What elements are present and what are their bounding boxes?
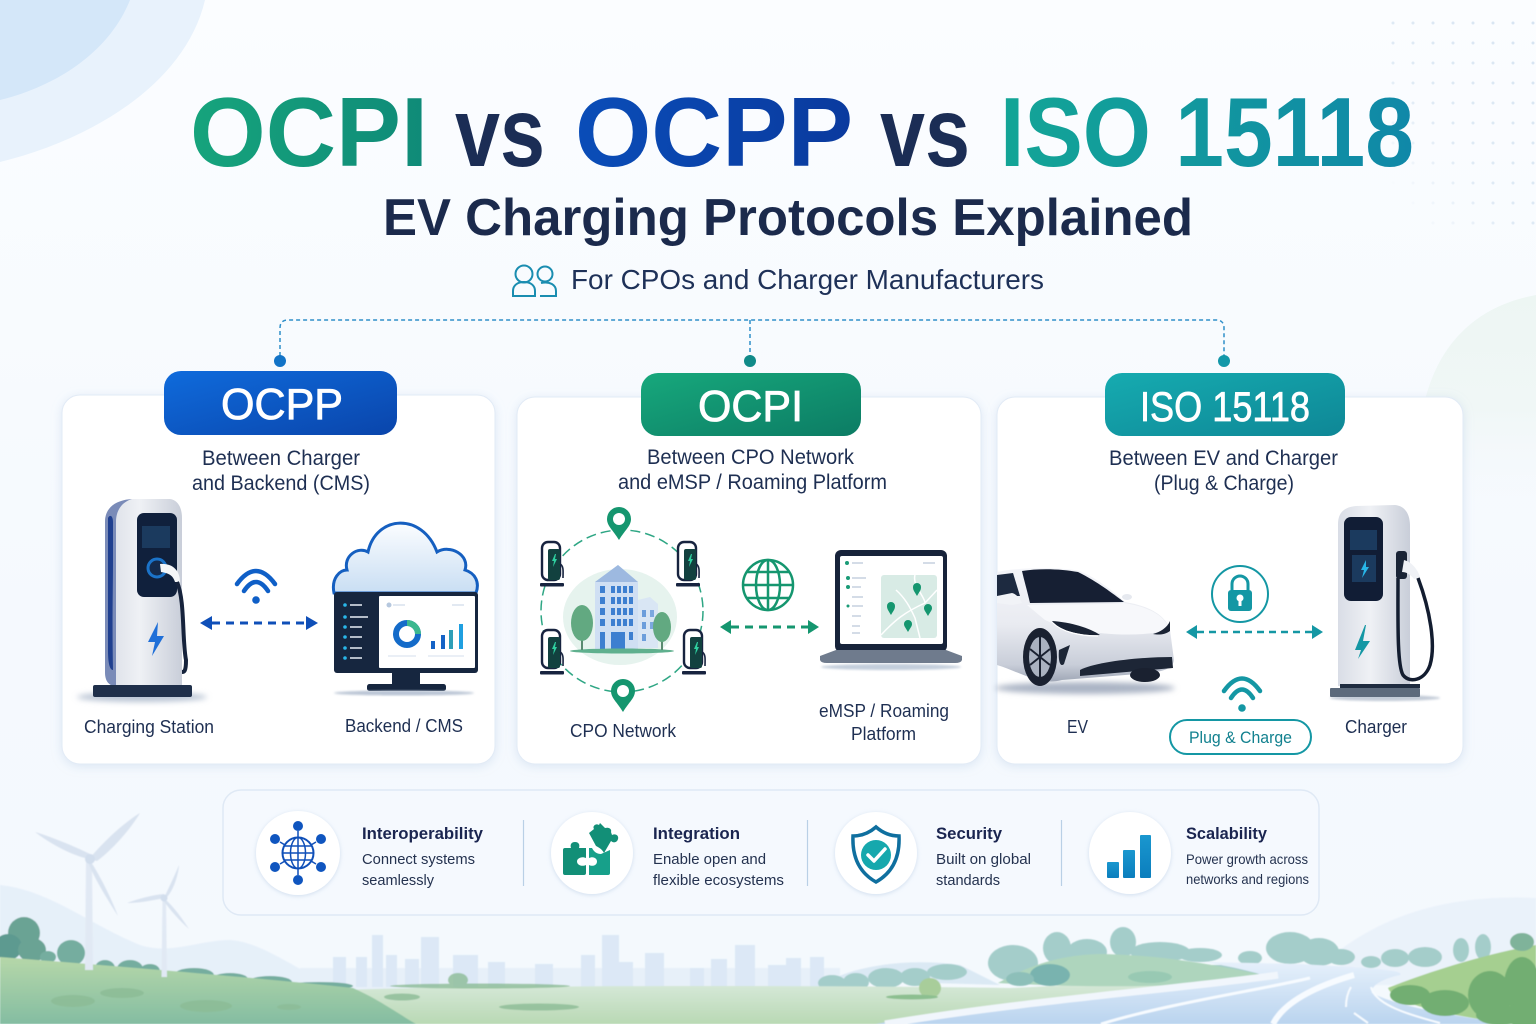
arrow: two-way	[720, 620, 819, 634]
title: OCPP	[575, 77, 853, 187]
benefit: interoperability: Interoperability	[362, 824, 484, 843]
description	[192, 447, 370, 495]
arrow: two-way	[200, 616, 318, 630]
description: Between CPO Network	[647, 446, 854, 469]
benefits bar	[223, 790, 1319, 915]
benefit: interoperability	[256, 811, 484, 895]
label: eMSP: eMSP / Roaming	[819, 701, 949, 721]
label: CPO network: CPO Network	[570, 721, 677, 741]
arrow: two-way	[1186, 625, 1323, 639]
benefit: security: Built on global	[936, 851, 1031, 868]
icon: lock	[1212, 566, 1268, 622]
icon: electric car	[995, 568, 1175, 694]
icon: map pins	[607, 507, 635, 712]
benefit: scalability: Scalability	[1186, 824, 1268, 843]
left hill	[0, 957, 416, 1024]
meadow bushes	[51, 973, 579, 1012]
icon: wifi	[237, 571, 275, 604]
label: eMSP: Platform	[851, 724, 916, 744]
icon: cloud and backend monitor	[333, 523, 478, 696]
benefit: interoperability: Connect systems	[362, 851, 475, 868]
icon: globe	[743, 560, 793, 610]
title	[190, 77, 1414, 187]
far right tree line	[818, 927, 1491, 991]
title: OCPI	[190, 77, 428, 187]
heading pill: ISO 15118: ISO 15118	[1140, 383, 1310, 430]
heading pill: OCPI: OCPI	[698, 382, 803, 431]
benefit: scalability: networks and regions	[1186, 871, 1309, 887]
label: charger: Charger	[1345, 717, 1407, 737]
icon: charging station	[77, 499, 207, 702]
panel: ISO 15118	[995, 373, 1463, 764]
audience line	[513, 264, 1044, 296]
description: Between Charger	[202, 447, 360, 470]
benefit: scalability: Power growth across	[1186, 851, 1308, 867]
left tree line	[0, 917, 353, 990]
wind turbines	[35, 813, 189, 977]
icon: connected globe	[270, 821, 326, 885]
badge: Plug & Charge	[1170, 720, 1311, 754]
benefit: interoperability: seamlessly	[362, 872, 434, 889]
label: EV: EV	[1067, 717, 1088, 737]
description: and eMSP / Roaming Platform	[618, 471, 887, 494]
title: vs	[880, 77, 970, 187]
landscape scene	[0, 813, 1536, 1024]
icons: chargers around network	[540, 542, 706, 674]
benefit: integration	[551, 812, 784, 894]
description: and Backend (CMS)	[192, 472, 370, 495]
heading pill: OCPP	[164, 371, 397, 435]
benefit: security: standards	[936, 872, 1000, 889]
road	[876, 962, 1510, 1024]
connector lines	[274, 320, 1230, 367]
icon: puzzle	[563, 823, 618, 875]
icon: wifi	[1224, 678, 1260, 712]
heading pill: OCPI	[641, 373, 861, 436]
icon: growth bars	[1107, 835, 1151, 878]
benefit: security: Security	[936, 824, 1003, 843]
right hill bushes	[1388, 933, 1536, 1024]
benefit: integration: flexible ecosystems	[653, 872, 784, 889]
icon: laptop with map	[820, 550, 962, 670]
benefit: scalability	[1089, 812, 1309, 894]
mid field	[340, 975, 1270, 1024]
decorative corner shapes	[0, 0, 1536, 408]
heading pill: ISO 15118	[1105, 373, 1345, 436]
road-side hill	[886, 954, 1268, 1000]
distant hills	[0, 885, 330, 985]
description	[1109, 447, 1338, 495]
city skyline	[300, 935, 840, 993]
badge: Plug & Charge: Plug & Charge	[1189, 728, 1292, 747]
heading pill: OCPP: OCPP	[221, 380, 343, 429]
description	[618, 446, 887, 494]
title: ISO 15118	[1000, 77, 1414, 187]
panel: OCPI	[517, 373, 981, 764]
title: vs	[455, 77, 545, 187]
icon: shield	[853, 827, 899, 882]
label: backend: Backend / CMS	[345, 716, 463, 736]
subtitle: EV Charging Protocols Explained	[383, 189, 1193, 247]
icon: users	[513, 266, 556, 296]
benefit: integration: Enable open and	[653, 851, 766, 868]
diagram: CPO network	[540, 507, 706, 712]
description: Between EV and Charger	[1109, 447, 1338, 470]
label: eMSP	[819, 701, 949, 744]
icon: building	[563, 565, 677, 665]
description: (Plug & Charge)	[1154, 472, 1294, 495]
icon: charger	[1330, 505, 1440, 701]
panel: OCPP	[62, 371, 495, 764]
audience text: For CPOs and Charger Manufacturers	[571, 264, 1044, 295]
benefit: security	[835, 812, 1031, 894]
label: charging station: Charging Station	[84, 717, 214, 737]
benefit: integration: Integration	[653, 824, 740, 843]
